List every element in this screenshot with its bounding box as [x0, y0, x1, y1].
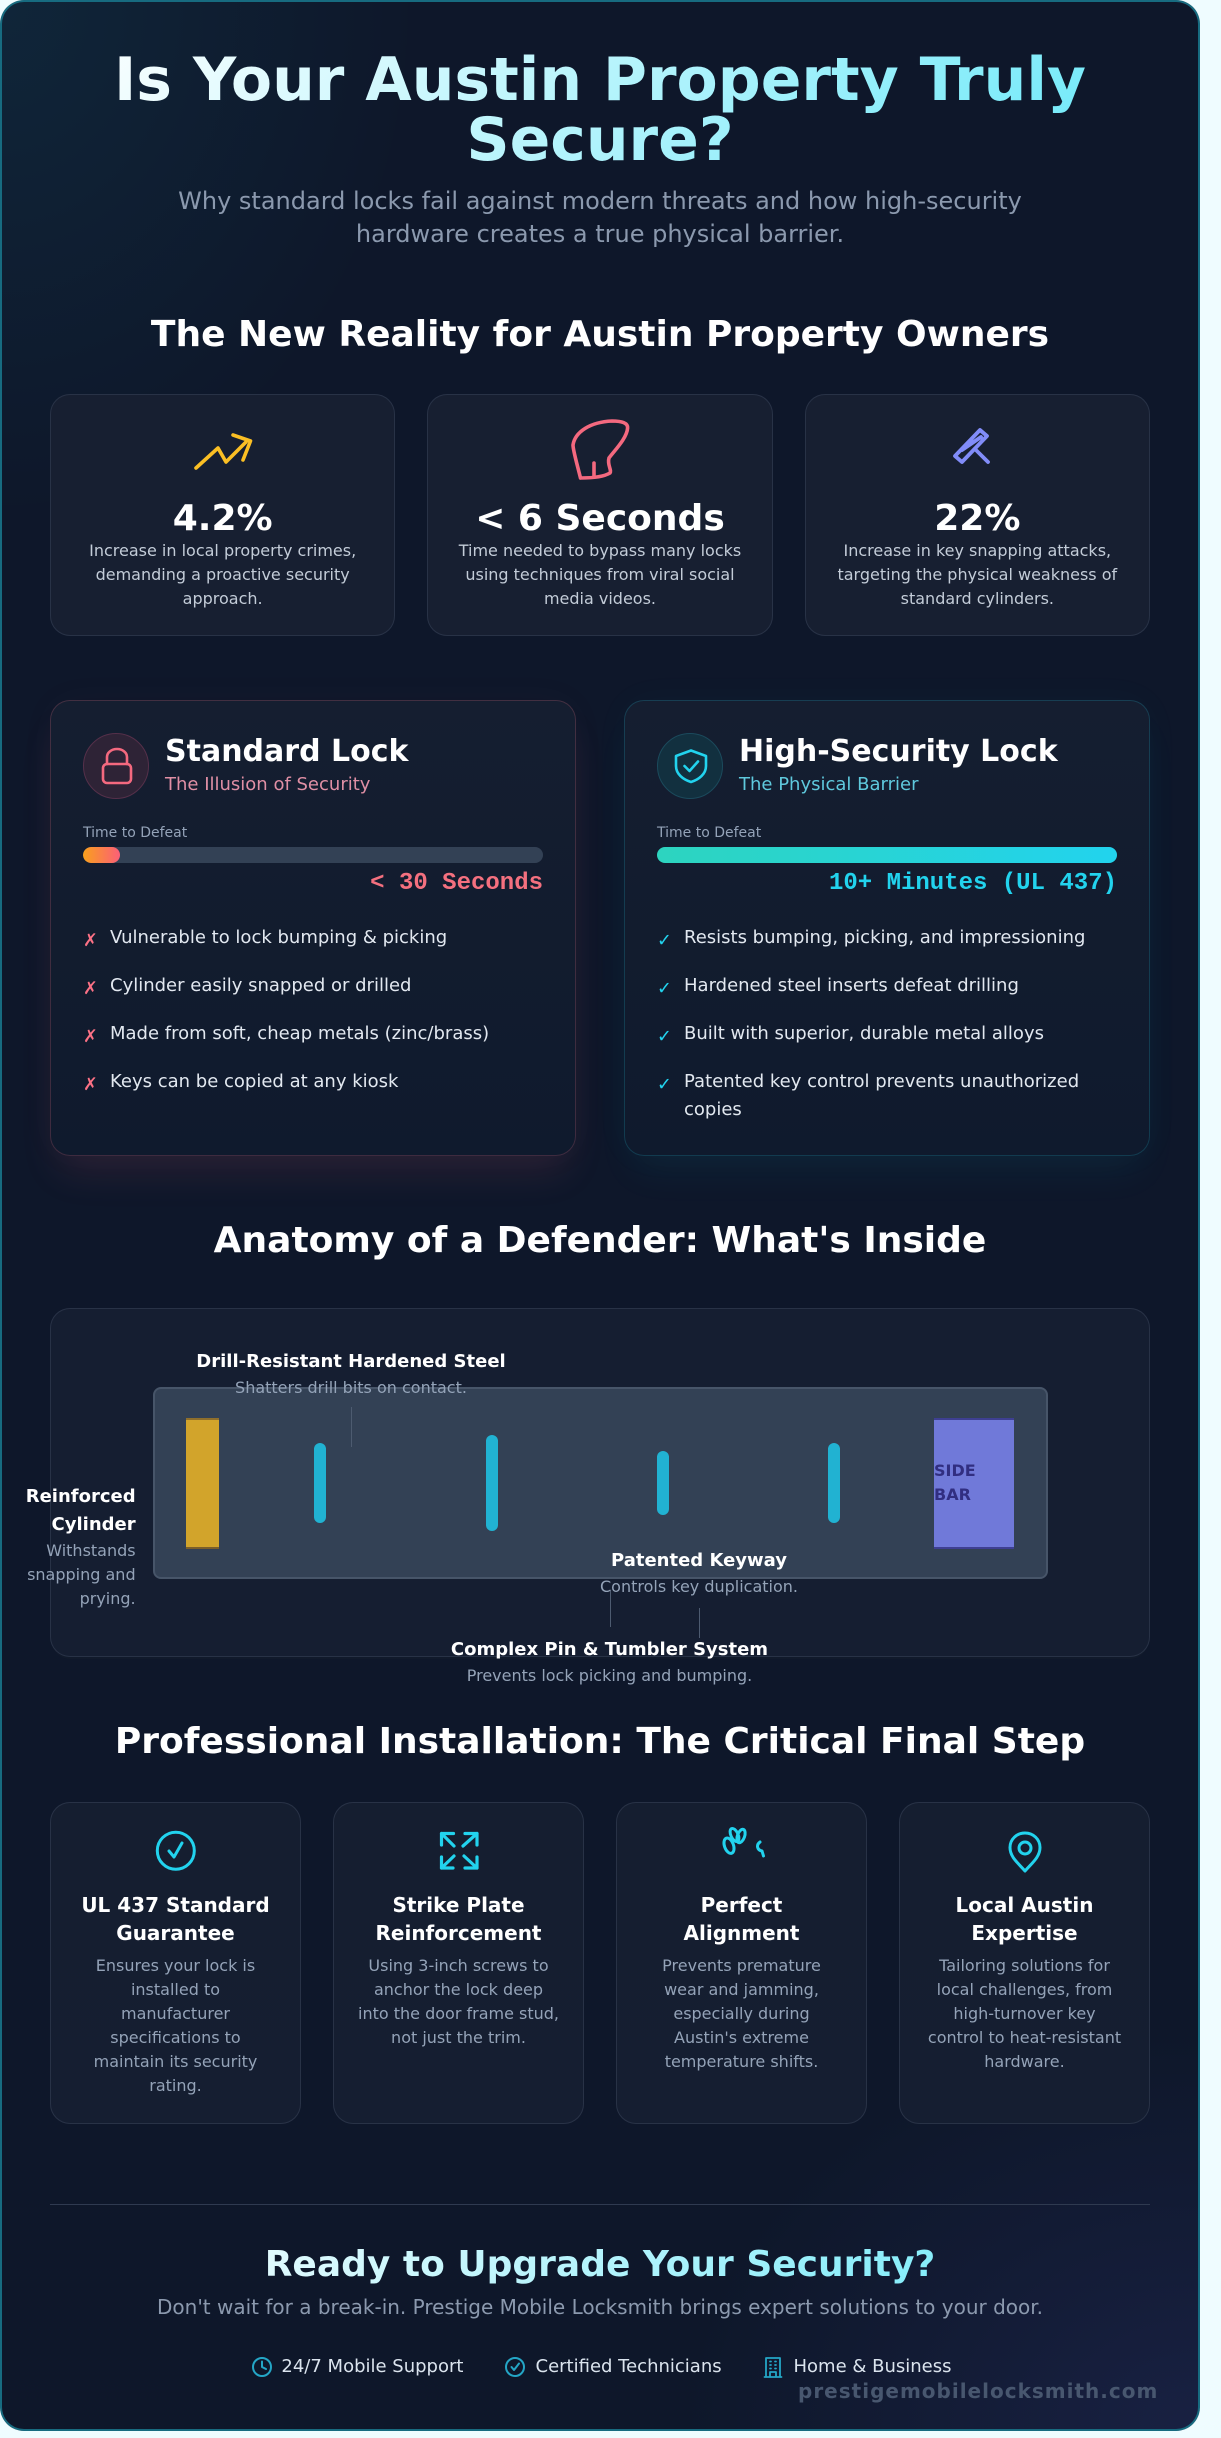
callout: reinforced cylinder: snapping and	[27, 1565, 136, 1584]
list mark: ✗	[83, 931, 98, 951]
footer subtitle: Don't wait for a break-in. Prestige Mobile Locksmith brings expert solutions to your door.	[157, 2295, 1043, 2319]
side bar: BAR	[934, 1485, 971, 1504]
panel subtitle: The Physical Barrier	[739, 774, 918, 795]
card title: Reinforcement	[376, 1921, 542, 1945]
badge: mobile support	[252, 2356, 463, 2377]
panel: stat bypass time	[427, 394, 773, 636]
list item: Built with superior, durable metal alloys	[684, 1023, 1044, 1044]
stat value: 22%	[934, 498, 1020, 539]
card description	[928, 1956, 1121, 2071]
list mark: ✗	[83, 1027, 98, 1047]
panel: perfect alignment	[616, 1802, 867, 2124]
badge: certified technicians	[505, 2356, 722, 2377]
card description: high-turnover key	[953, 2004, 1096, 2023]
subtitle	[178, 187, 1022, 248]
icon: clock	[252, 2357, 272, 2377]
card description: into the door frame stud,	[358, 2004, 559, 2023]
panel: stat key snapping	[805, 394, 1150, 636]
callout: reinforced cylinder	[26, 1486, 136, 1608]
card description	[358, 1956, 559, 2047]
icon: check circle	[505, 2357, 525, 2377]
list item: Patented key control prevents unauthorized	[684, 1071, 1079, 1092]
list mark: ✗	[83, 1075, 98, 1095]
list mark: ✓	[657, 979, 672, 999]
card description: installed to	[131, 1980, 220, 1999]
card title: Strike Plate	[392, 1893, 525, 1917]
card description: Austin's extreme	[674, 2028, 809, 2047]
stat description	[89, 541, 356, 608]
stat description: Increase in key snapping attacks,	[843, 541, 1111, 560]
list item: copies	[684, 1099, 742, 1120]
icon: building	[764, 2357, 782, 2378]
lock body	[152, 1387, 1048, 1579]
subtitle: hardware creates a true physical barrier.	[356, 220, 844, 248]
card title	[684, 1893, 799, 1945]
card description: Using 3-inch screws to	[368, 1956, 549, 1975]
connector line	[351, 1407, 352, 1447]
bar label: Time to Defeat	[83, 825, 187, 841]
card description: Tailoring solutions for	[939, 1956, 1110, 1975]
card description: wear and jamming,	[664, 1980, 819, 1999]
card title: UL 437 Standard	[81, 1893, 270, 1917]
list item: Made from soft, cheap metals (zinc/brass)	[110, 1023, 489, 1044]
progress bar: time to defeat	[83, 847, 543, 863]
card description: rating.	[149, 2076, 202, 2095]
stat description	[837, 541, 1118, 608]
callout: pin and tumbler: Prevents lock picking and bumping.	[467, 1666, 752, 1685]
panel: local expertise	[899, 1802, 1150, 2124]
list item: Resists bumping, picking, and impressioning	[684, 927, 1085, 948]
card description: especially during	[673, 2004, 810, 2023]
card description: manufacturer	[121, 2004, 230, 2023]
icon: fingerprint outline	[571, 419, 630, 480]
list item	[684, 1071, 1079, 1120]
pin	[314, 1443, 326, 1523]
stat description: media videos.	[544, 589, 656, 608]
panel: standard lock	[50, 700, 576, 1156]
callout: pin and tumbler: Complex Pin & Tumbler System	[451, 1639, 768, 1660]
pin	[486, 1435, 498, 1531]
icon: check circle	[156, 1830, 196, 1871]
stat description: demanding a proactive security	[96, 565, 350, 584]
pin	[828, 1443, 840, 1523]
card title: Alignment	[684, 1921, 799, 1945]
list item: Cylinder easily snapped or drilled	[110, 975, 411, 996]
stat description: approach.	[183, 589, 263, 608]
side bar: SIDE	[934, 1461, 976, 1480]
card description: specifications to	[110, 2028, 241, 2047]
callout: reinforced cylinder: prying.	[80, 1589, 136, 1608]
card title: Perfect	[701, 1893, 782, 1917]
stat description: Increase in local property crimes,	[89, 541, 356, 560]
list mark: ✓	[657, 1027, 672, 1047]
callout: pin and tumbler	[451, 1639, 768, 1685]
side bar	[934, 1418, 1014, 1548]
defeat time value: 10+ Minutes (UL 437)	[829, 870, 1117, 897]
card description	[662, 1956, 821, 2071]
reinforced cylinder bar	[186, 1418, 218, 1548]
card title	[81, 1893, 270, 1945]
subtitle: Why standard locks fail against modern threats and how high-security	[178, 187, 1022, 215]
badge text: Home & Business	[794, 2356, 952, 2377]
title: Secure?	[466, 105, 734, 175]
stat description: Time needed to bypass many locks	[459, 541, 741, 560]
card description: Ensures your lock is	[96, 1956, 255, 1975]
stat value: < 6 Seconds	[475, 498, 725, 539]
bar label: Time to Defeat	[657, 825, 761, 841]
panel title: High-Security Lock	[739, 734, 1058, 769]
title: Is Your Austin Property Truly	[114, 45, 1086, 115]
card title: Guarantee	[116, 1921, 235, 1945]
card description: Prevents premature	[662, 1956, 821, 1975]
panel subtitle: The Illusion of Security	[165, 774, 370, 795]
card title	[376, 1893, 542, 1945]
callout: drill-resistant steel: Drill-Resistant Hardened Steel	[196, 1351, 506, 1372]
heading: new reality: The New Reality for Austin Property Owners	[151, 314, 1049, 355]
panel: stat local crimes	[50, 394, 395, 636]
list item: Hardened steel inserts defeat drilling	[684, 975, 1019, 996]
callout: reinforced cylinder: Reinforced	[26, 1486, 136, 1507]
feature list	[83, 927, 489, 1095]
defeat time value: < 30 Seconds	[370, 870, 543, 897]
icon: map pin	[1008, 1832, 1042, 1873]
card description: not just the trim.	[391, 2028, 526, 2047]
list item: Keys can be copied at any kiosk	[110, 1071, 398, 1092]
pin	[657, 1451, 669, 1515]
callout: patented keyway: Controls key duplication.	[600, 1577, 798, 1596]
progress bar: time to defeat	[657, 847, 1117, 863]
card title: Local Austin	[956, 1893, 1093, 1917]
list mark: ✗	[83, 979, 98, 999]
card description: hardware.	[984, 2052, 1065, 2071]
stat description	[458, 541, 741, 608]
footer heading	[50, 2242, 1150, 2288]
panel: UL 437 guarantee	[50, 1802, 301, 2124]
icon: trending arrow	[194, 433, 252, 470]
heading: professional installation: Professional Installation: The Critical Final Step	[115, 1721, 1085, 1762]
callout: drill-resistant steel: Shatters drill bits on contact.	[235, 1378, 467, 1397]
heading: anatomy: Anatomy of a Defender: What's Inside	[214, 1220, 986, 1261]
badge text: Certified Technicians	[536, 2356, 722, 2377]
panel title: Standard Lock	[165, 734, 408, 769]
card description: temperature shifts.	[665, 2052, 818, 2071]
card description: maintain its security	[94, 2052, 257, 2071]
badge: home and business	[764, 2356, 952, 2378]
feature list	[657, 927, 1085, 1120]
stat value: 4.2%	[173, 498, 273, 539]
callout: patented keyway: Patented Keyway	[611, 1550, 787, 1571]
badge text: 24/7 Mobile Support	[281, 2356, 463, 2377]
watermark: prestigemobilelocksmith.com	[798, 2379, 1158, 2403]
stat description: standard cylinders.	[901, 589, 1054, 608]
panel: high-security lock	[624, 700, 1150, 1156]
icon: alignment blobs	[722, 1827, 765, 1858]
icon: tool	[953, 428, 990, 464]
icon: shield in circle	[657, 733, 723, 799]
panel: lock anatomy diagram	[50, 1308, 1150, 1657]
card title	[956, 1893, 1093, 1945]
card description: control to heat-resistant	[928, 2028, 1121, 2047]
connector line	[610, 1590, 611, 1627]
list mark: ✓	[657, 931, 672, 951]
stat description: using techniques from viral social	[465, 565, 735, 584]
stat description: targeting the physical weakness of	[837, 565, 1117, 584]
callout: patented keyway	[600, 1550, 798, 1596]
icon: expand arrows	[440, 1832, 479, 1870]
list mark: ✓	[657, 1075, 672, 1095]
callout: drill-resistant steel	[196, 1351, 506, 1397]
footer heading: Ready to Upgrade Your Security?	[265, 2244, 935, 2285]
title	[50, 50, 1150, 170]
connector line	[699, 1608, 700, 1638]
callout: reinforced cylinder: Cylinder	[52, 1514, 136, 1535]
card description	[94, 1956, 257, 2095]
callout: reinforced cylinder: Withstands	[46, 1541, 136, 1560]
card description: local challenges, from	[937, 1980, 1112, 1999]
icon: padlock in circle	[83, 733, 149, 799]
card description: anchor the lock deep	[374, 1980, 543, 1999]
list item: Vulnerable to lock bumping & picking	[110, 927, 447, 948]
card title: Expertise	[971, 1921, 1078, 1945]
panel: strike plate	[333, 1802, 584, 2124]
